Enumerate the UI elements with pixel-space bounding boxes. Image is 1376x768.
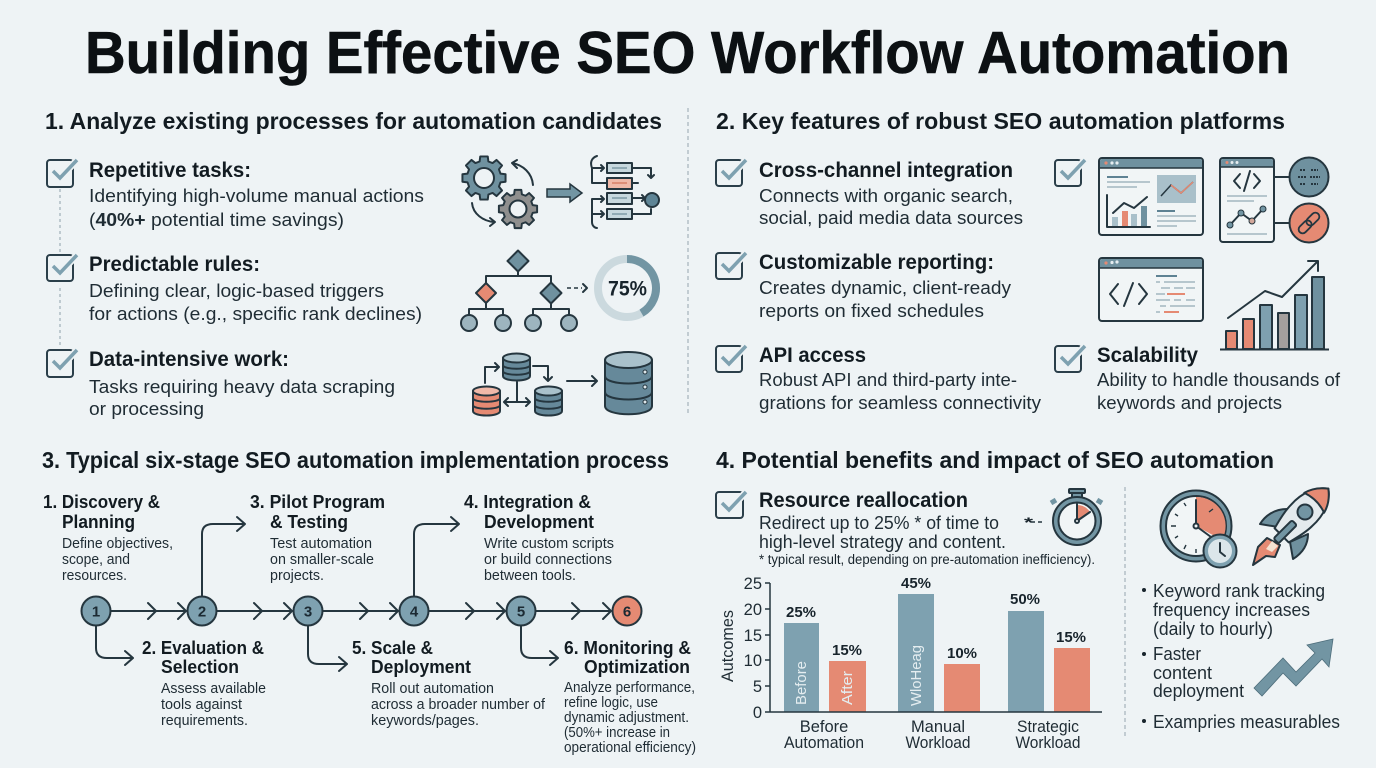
bar chart: outcomes: Manual [911,718,965,736]
step text: evaluation and selection: Assess available [161,681,266,697]
step text: pilot program and testing: & Testing [270,512,348,532]
text block: benefit bullets: frequency increases [1153,599,1310,620]
icon: code window with API nodes [1220,158,1328,242]
step text: monitoring and optimization: Optimization [584,657,690,677]
bar chart: outcomes: 0 [753,704,762,722]
icon: dashboard window [1099,158,1203,235]
step text: scale and deployment: Roll out automation [371,681,494,697]
step text: monitoring and optimization: dynamic adjustment. [564,710,689,726]
bar chart: outcomes: Autcomes [719,610,737,682]
text block: cross-channel integration [759,159,1023,228]
bar chart: outcomes: Strategic [1017,718,1079,736]
icon: checkbox resource reallocation [716,492,746,518]
step text: pilot program and testing: Test automation [270,536,372,552]
panel: section 1 analyze processes [45,108,662,419]
step text: scale and deployment [352,638,546,729]
text block: predictable rules [89,253,422,324]
text block: data-intensive work: or processing [89,398,204,419]
icon: checkbox predictable rules [47,255,77,281]
heading: section 2: 2. Key features of robust SEO automation platforms [716,108,1285,134]
step text: pilot program and testing [250,492,385,584]
text block: resource reallocation [759,489,1095,567]
step node 3: 3 [304,604,312,620]
step text: pilot program and testing: projects. [270,568,324,584]
icon: databases [473,352,652,416]
text block: API access: Robust API and third-party inte- [759,369,1017,390]
text block: resource reallocation: high-level strategy and content. [759,531,1006,552]
step text: evaluation and selection [142,638,266,729]
step text: pilot program and testing: 3. Pilot Program [250,492,385,512]
text block: data-intensive work: Tasks requiring heavy data scraping [89,376,395,397]
text block: cross-channel integration: social, paid media data sources [759,207,1023,228]
icon: upward trend arrow [1254,639,1333,696]
icon: checkbox data-intensive work [47,350,77,377]
bar chart: outcomes: 15% [832,642,862,659]
step text: discovery and planning: resources. [62,568,127,584]
title: Building Effective SEO Workflow Automation [85,20,1290,86]
step node 4: 4 [410,604,419,620]
step text: integration and development: or build connections [484,552,612,568]
step text: discovery and planning: scope, and [62,552,130,568]
bar chart: outcomes: Before [793,661,810,705]
bar chart: outcomes: Automation [784,734,864,752]
text block: scalability: Scalability [1097,344,1198,367]
icon: checkbox customizable reporting [716,253,746,279]
icon: rocket [1253,478,1339,565]
heading: section 4: 4. Potential benefits and impact of SEO automation [716,447,1274,473]
text block: customizable reporting [759,251,1012,321]
step text: scale and deployment: 5. Scale & [352,638,433,658]
text block: API access: grations for seamless connectivity [759,392,1042,413]
text block: customizable reporting: Customizable reporting: [759,251,994,274]
text block: data-intensive work: Data-intensive work: [89,348,289,371]
icon: clock [1160,490,1236,568]
panel: section 3 implementation process [42,447,696,756]
text block: cross-channel integration: Connects with organic search, [759,185,1013,206]
bar chart: outcomes: 10% [947,645,977,662]
step text: discovery and planning: Planning [62,512,135,532]
step text: integration and development: 4. Integration & [464,492,591,512]
bar chart: outcomes: WloHeag [908,645,925,706]
icon: decision tree to 75 percent donut [461,250,656,331]
step text: monitoring and optimization: 6. Monitoring & [564,638,691,658]
heading: section 3: 3. Typical six-stage SEO automation implementation process [42,447,669,473]
process flow arrows [96,517,611,671]
step text: discovery and planning: Define objectives, [62,536,173,552]
text block: data-intensive work [89,348,395,419]
step text: integration and development [464,492,614,584]
text block: repetitive tasks: Identifying high-volume manual actions [89,185,424,206]
text block: benefit bullets: Exampries measurables [1153,711,1340,732]
text block: benefit bullets [1142,580,1340,732]
bar chart: outcomes: 15 [744,627,762,645]
text block: resource reallocation: Resource reallocation [759,489,968,512]
text block: resource reallocation: Redirect up to 25% * of time to [759,512,999,533]
step node 6: 6 [623,604,631,620]
icon: growth bar chart [1220,261,1329,350]
bar chart: outcomes: 25 [744,575,762,593]
icon: checkbox API access [716,346,746,372]
text block: repetitive tasks: (40%+ potential time savings) [89,209,344,230]
step text: integration and development: between tools. [484,568,576,584]
step text: evaluation and selection: requirements. [161,713,248,729]
icon: checkbox repetitive tasks [47,160,77,187]
step node 1 [82,596,110,626]
text block: benefit bullets: Faster [1153,643,1201,664]
text block: scalability: keywords and projects [1097,392,1282,413]
step node 5 [506,596,536,626]
icon: checkbox top right [1055,160,1085,186]
bar chart: outcomes: 20 [744,601,762,619]
bar chart: outcomes: After [839,671,856,705]
heading: section 1: 1. Analyze existing processes for automation candidates [45,108,662,134]
step text: evaluation and selection: Selection [161,657,239,677]
step text: pilot program and testing: on smaller-scale [270,552,374,568]
icon: checkbox cross-channel [716,160,746,186]
step text: monitoring and optimization [564,638,696,756]
bar chart: outcomes: 10 [744,652,762,670]
icon: checkbox scalability [1055,346,1085,372]
bar chart: outcomes: Workload [906,734,970,752]
bar chart: outcomes: 45% [901,575,931,592]
step text: monitoring and optimization: (50%+ increase in [564,725,670,741]
step text: evaluation and selection: 2. Evaluation & [142,638,264,658]
step text: discovery and planning: 1. Discovery & [43,492,160,512]
step node 4 [400,596,428,626]
text block: resource reallocation: * typical result, depending on pre-automation inefficiency). [759,552,1095,567]
step text: discovery and planning [43,492,173,584]
text block: cross-channel integration: Cross-channel integration [759,159,1013,182]
bar chart: outcomes: 50% [1010,591,1040,608]
step text: scale and deployment: keywords/pages. [371,713,479,729]
bar chart: outcomes: 25% [786,604,816,621]
step text: scale and deployment: across a broader number of [371,697,546,713]
step text: monitoring and optimization: operational efficiency) [564,740,696,756]
step node 2 [188,596,216,626]
text block: repetitive tasks [89,159,424,230]
text block: benefit bullets: Keyword rank tracking [1153,580,1325,601]
step text: monitoring and optimization: refine logic, use [564,695,658,711]
step node 3 [294,596,322,626]
icon: decision tree to 75 percent donut: 75% [608,278,647,300]
panel: section 2 platform features [716,108,1341,413]
bar chart: outcomes: 15% [1056,629,1086,646]
text block: scalability [1097,344,1341,413]
icon: stopwatch with dashed pointer [1024,489,1102,545]
step text: monitoring and optimization: Analyze performance, [564,680,695,696]
step text: integration and development: Development [484,512,594,532]
bar chart: outcomes [719,575,1102,752]
text block: repetitive tasks: Repetitive tasks: [89,159,251,182]
text block: predictable rules: Predictable rules: [89,253,260,276]
icon: code report window [1099,258,1203,321]
text block: predictable rules: Defining clear, logic-based triggers [89,280,384,301]
bar chart: outcomes: Before [800,718,848,736]
step node 5: 5 [517,604,525,620]
panel: section 4 benefits [716,447,1340,752]
text block: predictable rules: for actions (e.g., specific rank declines) [89,303,422,324]
step node 2: 2 [198,604,206,620]
text block: benefit bullets: deployment [1153,680,1244,701]
step text: integration and development: Write custom scripts [484,536,614,552]
bar chart: outcomes: 5 [753,678,762,696]
text block: customizable reporting: reports on fixed schedules [759,300,984,321]
text block: customizable reporting: Creates dynamic, client-ready [759,277,1012,298]
text block: API access [759,344,1042,413]
text block: benefit bullets: content [1153,662,1212,683]
icon: gears to workflow [462,156,659,228]
text block: benefit bullets: (daily to hourly) [1153,618,1273,639]
text block: API access: API access [759,344,866,367]
step text: evaluation and selection: tools against [161,697,242,713]
step node 6 [612,596,642,626]
step text: scale and deployment: Deployment [371,657,471,677]
step node 1: 1 [92,604,100,620]
bar chart: outcomes: Workload [1016,734,1080,752]
text block: scalability: Ability to handle thousands of [1097,369,1341,390]
icon: stopwatch with dashed pointer: * [1024,514,1034,530]
